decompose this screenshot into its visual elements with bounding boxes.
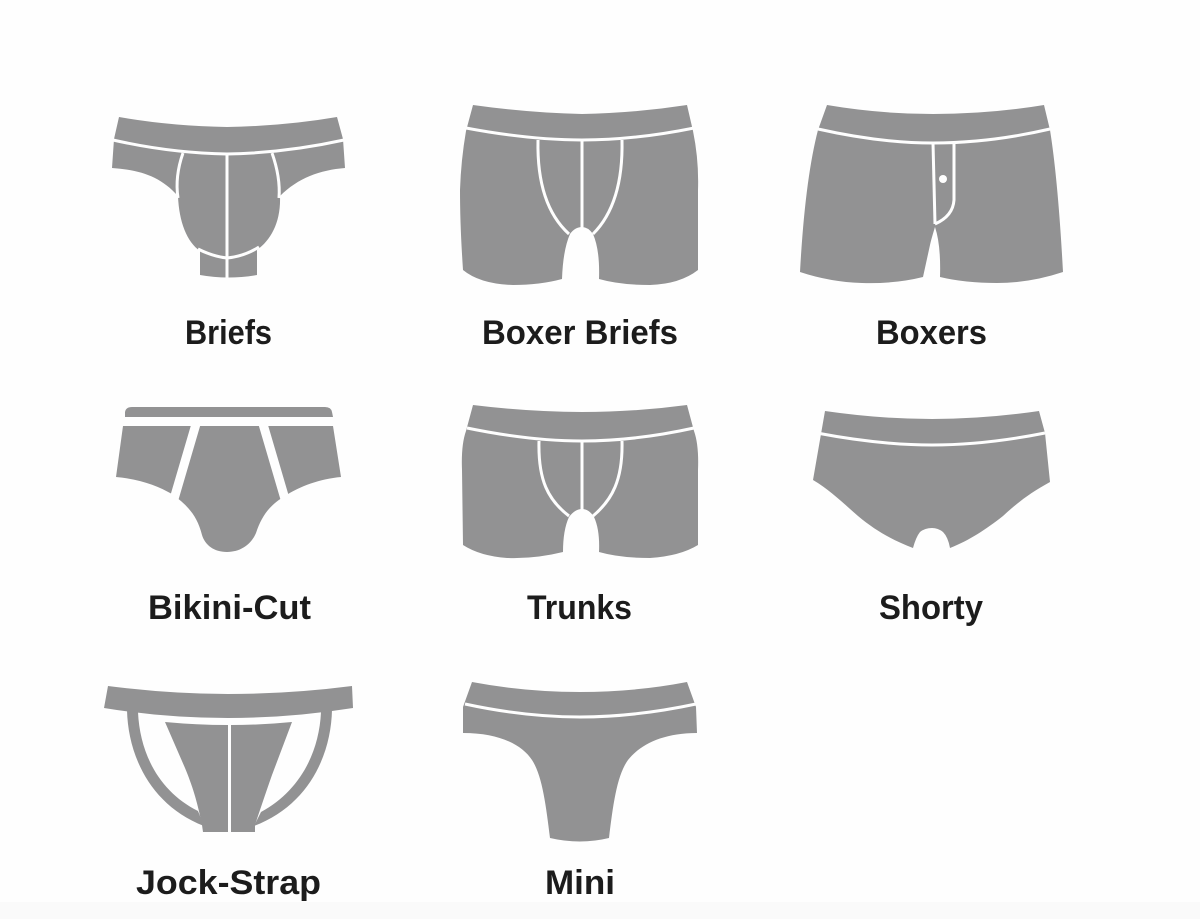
item: shorty	[813, 411, 1050, 627]
icon: button	[939, 175, 947, 183]
item: trunks	[462, 405, 698, 627]
side straps	[127, 710, 204, 826]
icon: jock-strap	[104, 686, 353, 832]
item: jock-strap	[104, 686, 353, 902]
label: Bikini-Cut: Bikini-Cut	[148, 589, 311, 627]
waistband	[104, 686, 353, 718]
item: bikini-cut	[116, 407, 341, 627]
item: briefs	[112, 117, 345, 352]
label: Briefs: Briefs	[185, 314, 272, 352]
pouch	[165, 722, 228, 832]
label: Jock-Strap: Jock-Strap	[136, 864, 321, 902]
icon: briefs	[112, 117, 345, 279]
icon: shorty	[813, 411, 1050, 548]
label: Shorty: Shorty	[879, 589, 983, 627]
item: boxers	[800, 105, 1063, 352]
item: mini	[463, 682, 697, 902]
label: Mini: Mini	[545, 864, 615, 902]
item: boxer briefs	[460, 105, 698, 352]
icon: mini	[463, 682, 697, 842]
label: Boxer Briefs: Boxer Briefs	[482, 314, 678, 352]
label: Trunks: Trunks	[527, 589, 632, 627]
icon: boxers	[800, 105, 1063, 283]
icon: boxer briefs	[460, 105, 698, 285]
icon: bikini-cut	[116, 407, 341, 552]
icon: trunks	[462, 405, 698, 558]
label: Boxers: Boxers	[876, 314, 987, 352]
